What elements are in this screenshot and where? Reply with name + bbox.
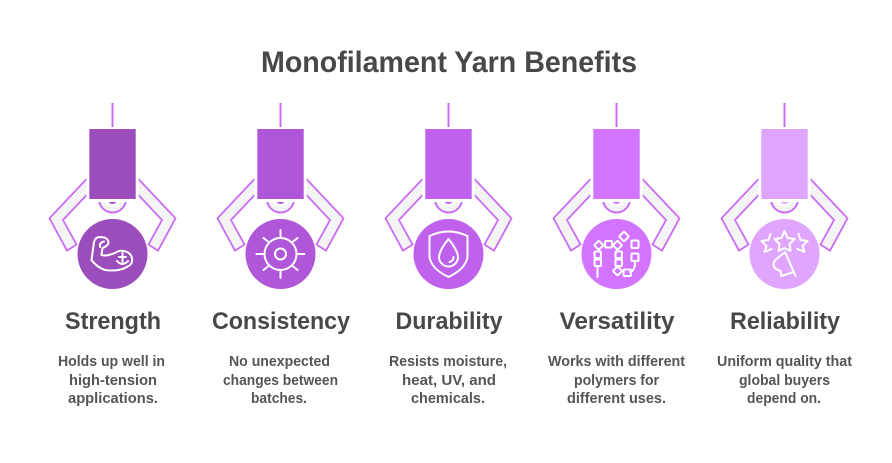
claw: Reliability [722, 103, 848, 251]
description: different uses. [567, 391, 666, 407]
description: Works with different [548, 354, 685, 370]
description [223, 354, 338, 407]
heading: Durability [396, 308, 503, 335]
heading: Consistency [212, 308, 351, 335]
claw: Versatility [554, 103, 680, 251]
description: Uniform quality that [717, 354, 852, 370]
heading: Reliability [730, 308, 841, 335]
column: Durability [386, 103, 512, 407]
description: applications. [68, 391, 158, 407]
description: depend on. [747, 391, 821, 407]
description: global buyers [739, 373, 830, 389]
description: changes between [223, 373, 338, 389]
claw: Strength [50, 103, 176, 251]
column: Reliability [717, 103, 852, 407]
icon: stars and megaphone [750, 219, 820, 289]
heading: Versatility [560, 308, 675, 335]
description: Holds up well in [58, 354, 165, 370]
description: Resists moisture, [389, 354, 507, 370]
column: Strength [50, 103, 176, 407]
icon: shield with water drop [414, 219, 484, 289]
description: high-tension [69, 373, 157, 389]
description [58, 354, 165, 407]
column: Versatility [548, 103, 685, 407]
description [717, 354, 852, 407]
icon: sun gear [246, 219, 316, 289]
claw: Consistency [218, 103, 344, 251]
description: chemicals. [411, 391, 485, 407]
description [548, 354, 685, 407]
column: Consistency [212, 103, 351, 407]
heading: Strength [65, 308, 161, 335]
description: No unexpected [229, 354, 330, 370]
icon: polymer chain [582, 219, 652, 289]
claw: Durability [386, 103, 512, 251]
description [389, 354, 507, 407]
description: batches. [251, 391, 307, 407]
icon: flexed arm [78, 219, 148, 289]
description: polymers for [574, 373, 659, 389]
title: Monofilament Yarn Benefits [261, 46, 637, 79]
description: heat, UV, and [402, 373, 496, 389]
